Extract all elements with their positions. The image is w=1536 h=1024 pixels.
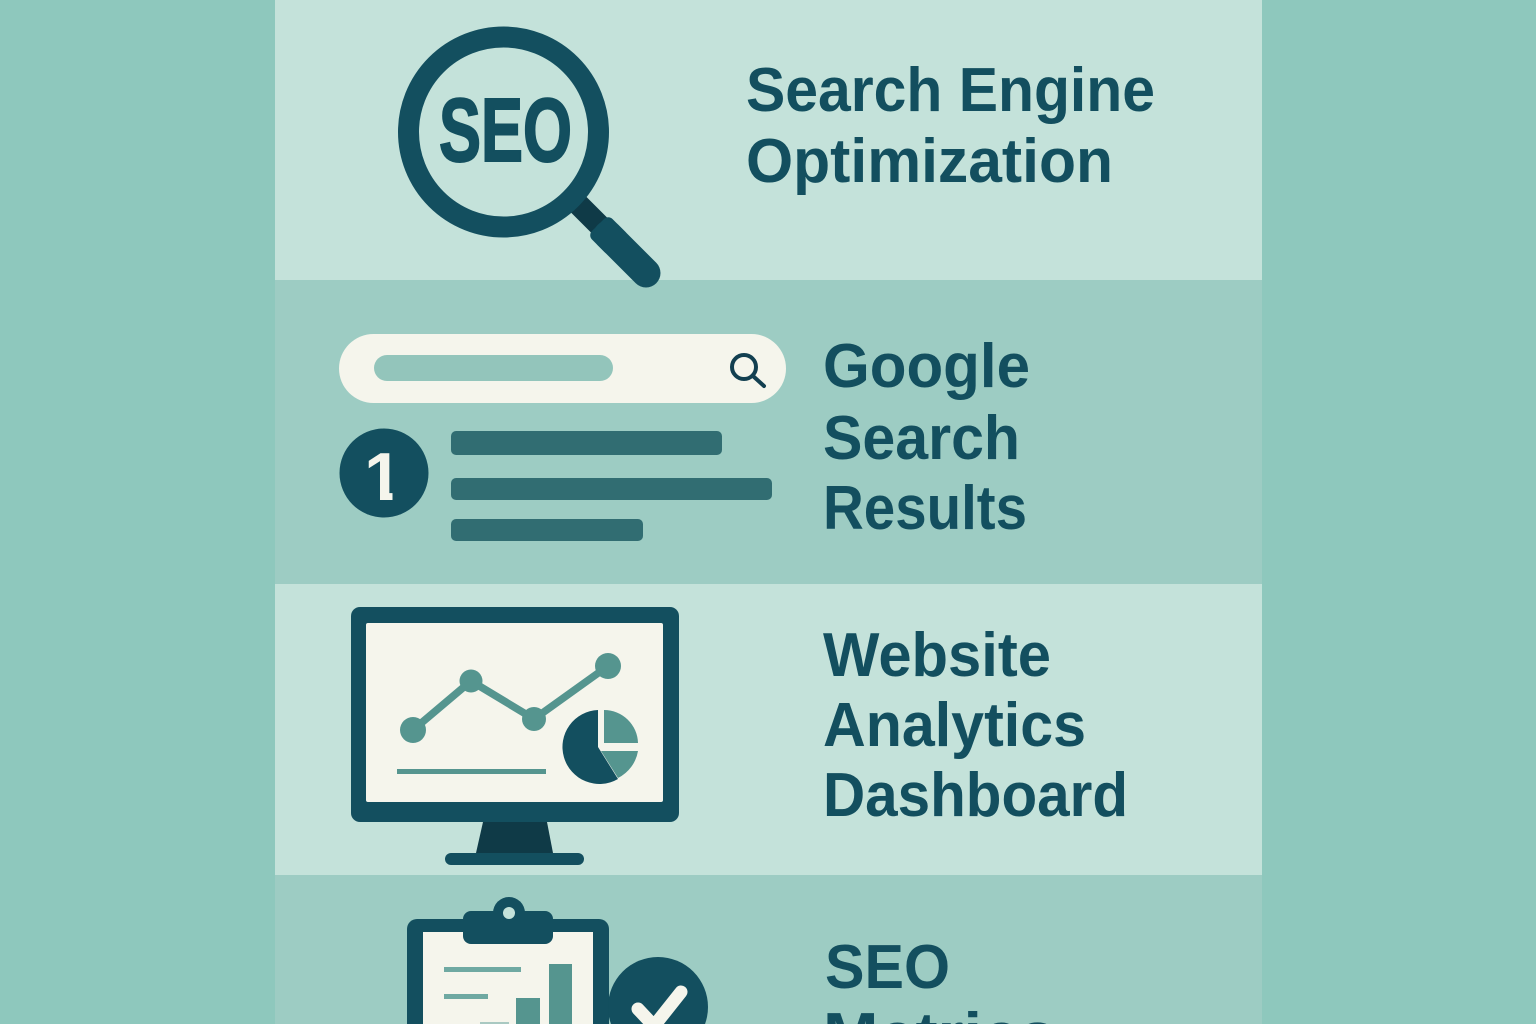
heading: SEO Metrics: SEO: [825, 933, 950, 1002]
line chart: [397, 653, 621, 774]
heading: Website Analytics Dashboard: Dashboard: [823, 761, 1128, 830]
icon: check badge: [608, 957, 708, 1024]
icon: SEO magnifying glass: SEO: [439, 81, 572, 181]
icon: rank number one badge: 1: [364, 439, 402, 515]
icon: clipboard: [407, 897, 609, 1024]
heading: SEO Metrics: [823, 933, 1056, 1024]
heading: Google Search Results: Google: [823, 332, 1030, 401]
heading: Search Engine Optimization: Search Engine: [746, 56, 1155, 125]
panel: google search results: [275, 280, 1262, 584]
heading: Website Analytics Dashboard: Website: [823, 621, 1051, 690]
heading: Google Search Results: Results: [823, 474, 1027, 543]
panel: website analytics dashboard: [275, 584, 1262, 875]
heading: Website Analytics Dashboard: [823, 621, 1128, 830]
icon: monitor: [351, 607, 679, 865]
icon: SEO magnifying glass: [408, 37, 646, 273]
heading: Google Search Results: Search: [823, 404, 1020, 473]
pie chart: [562, 710, 638, 784]
icon: search bar: [339, 334, 786, 403]
panel: search engine optimization: [275, 0, 1262, 280]
heading: Search Engine Optimization: Optimization: [746, 127, 1113, 196]
heading: Website Analytics Dashboard: Analytics: [823, 691, 1086, 760]
infographic canvas: [275, 0, 1262, 1024]
panel: SEO metrics: [275, 875, 1262, 1024]
heading: Search Engine Optimization: [746, 56, 1155, 196]
result lines: [451, 431, 772, 541]
heading: Google Search Results: [823, 332, 1030, 543]
icon: rank number one badge: [340, 428, 428, 518]
